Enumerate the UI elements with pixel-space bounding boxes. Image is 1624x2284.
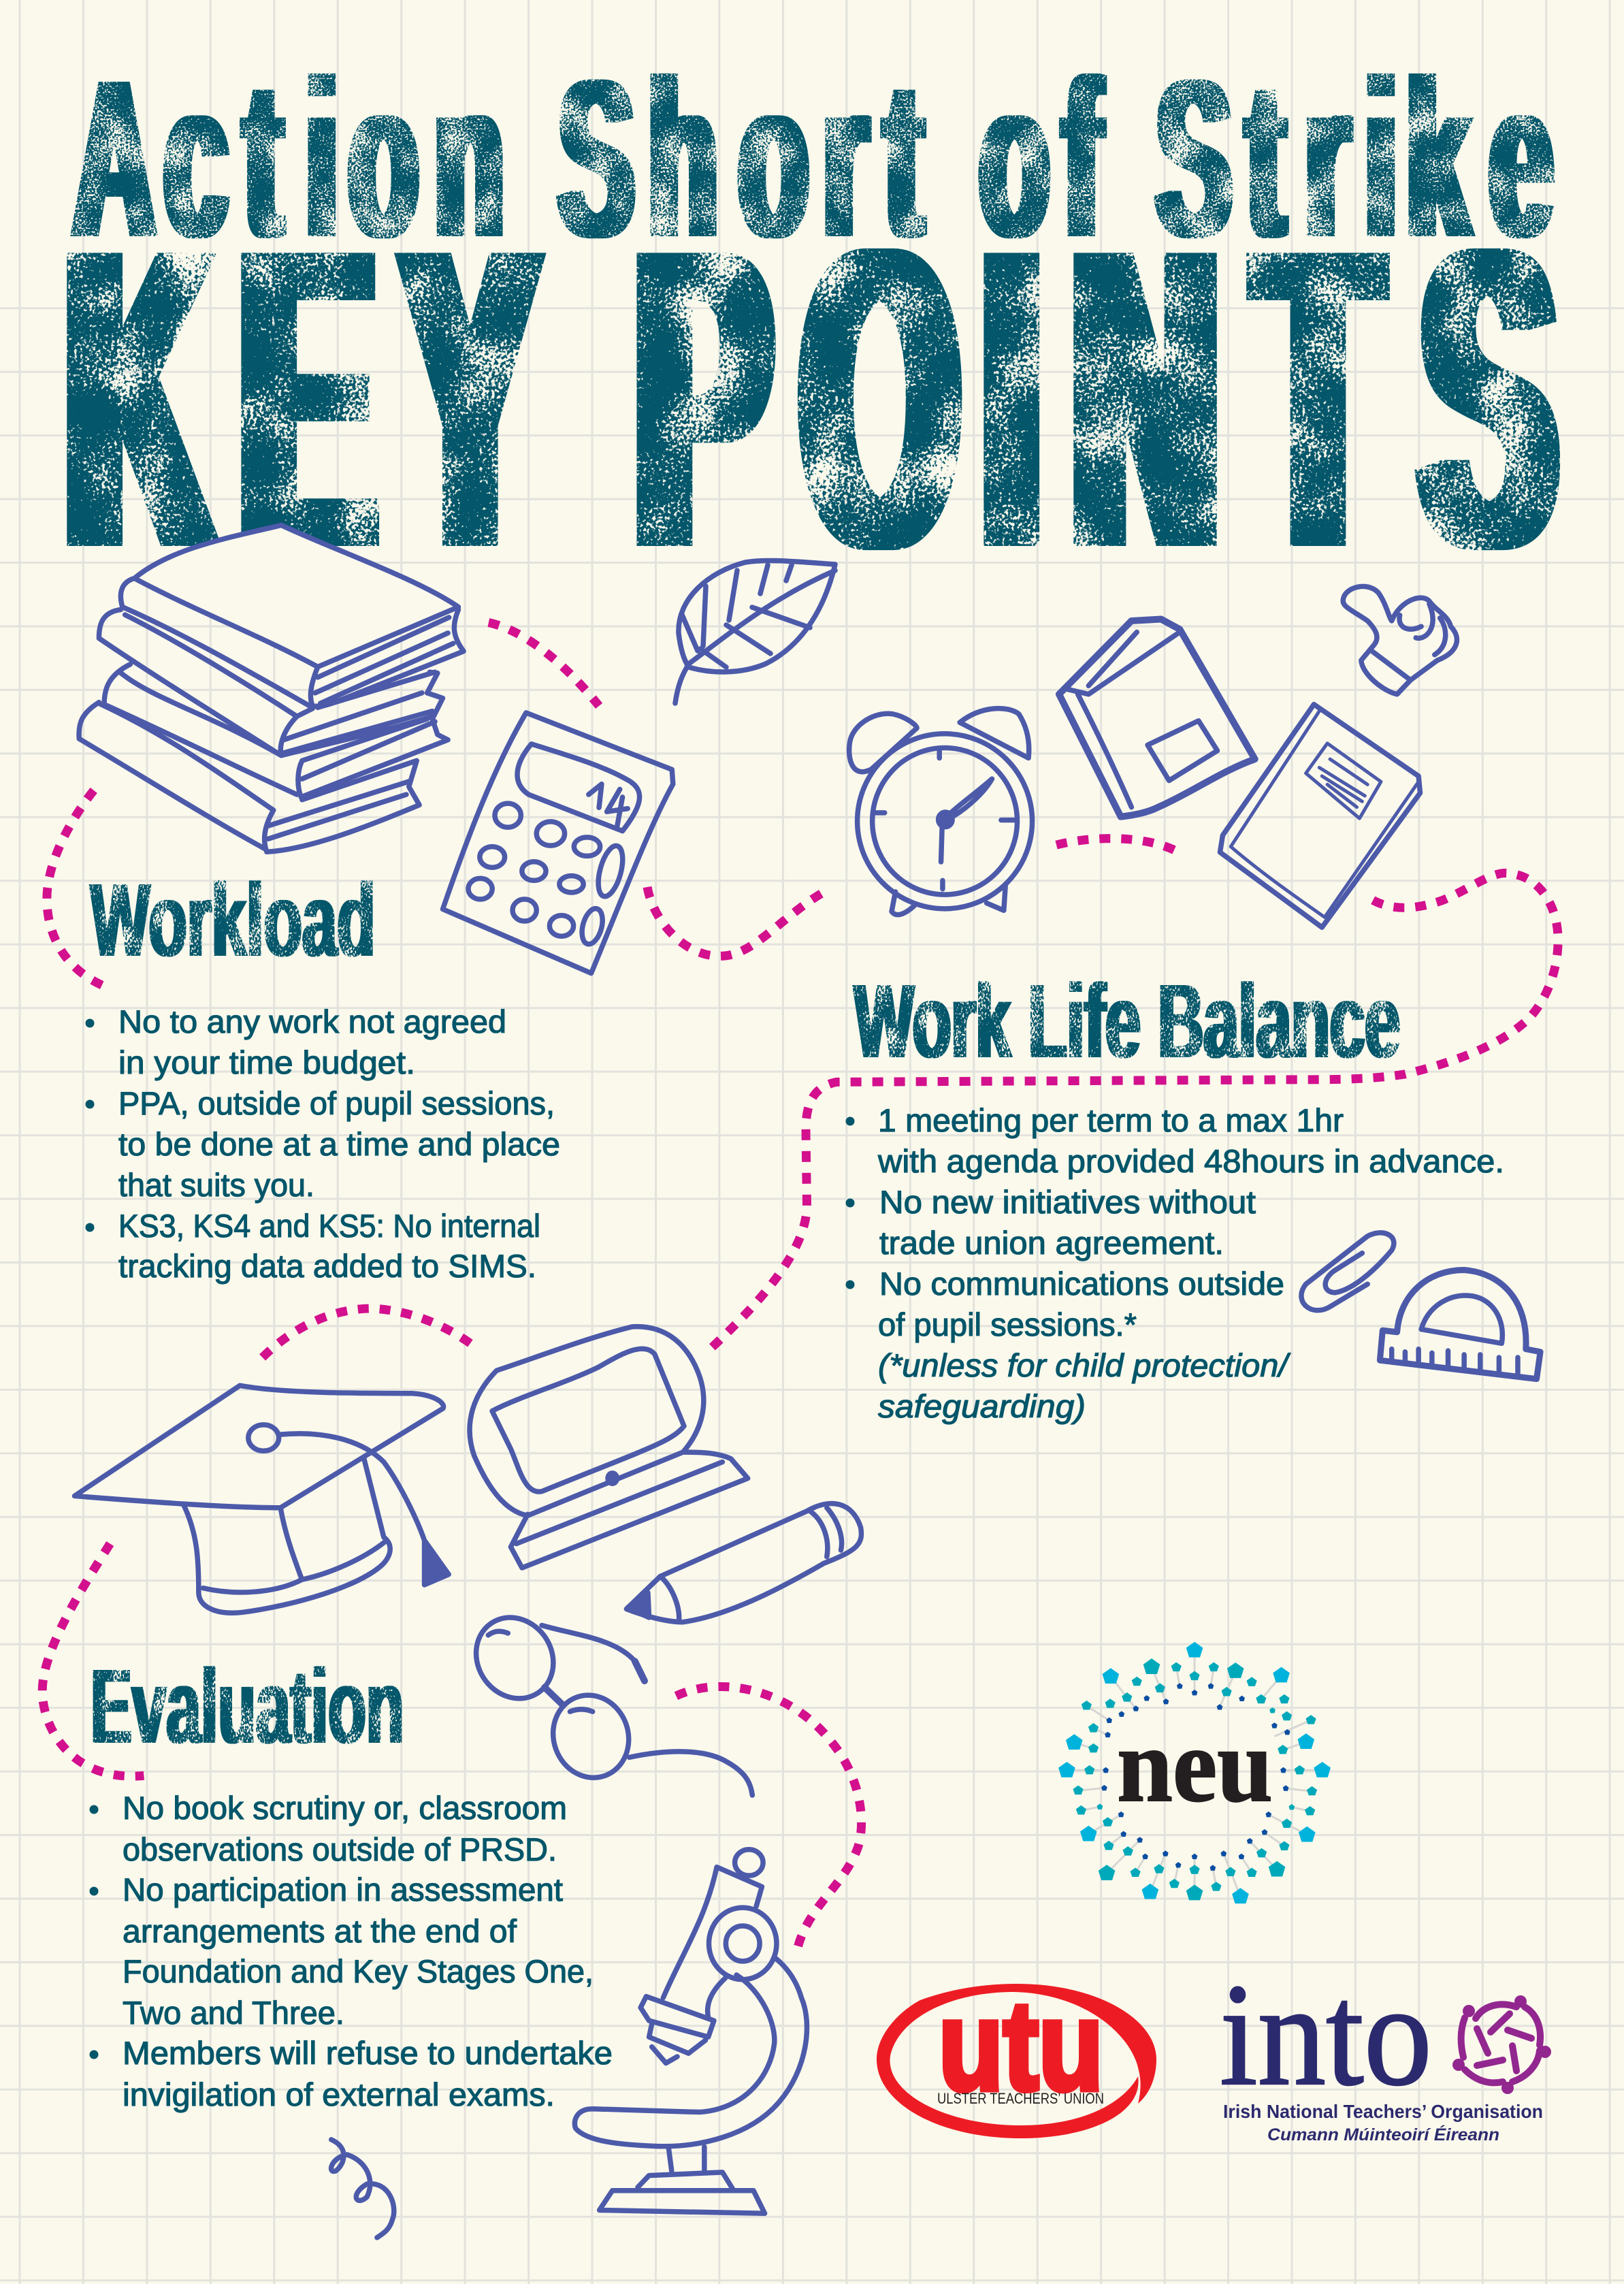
logo: into [1220,1953,1543,2144]
text: workload bullets: that suits you. [118,1167,314,1203]
icon: exercise book [1220,705,1420,927]
title: Action Short of Strike: Action Short of Strike [74,34,1553,285]
icon: squiggle [331,2140,394,2238]
logo: into: into [1220,1953,1432,2116]
text: workload bullets: KS3, KS4 and KS5: No internal [118,1208,540,1244]
logo: utu: ULSTER TEACHERS’ UNION [937,2090,1104,2107]
icon: leaf [675,560,835,703]
icon: paperclip [1301,1233,1394,1310]
logo: into: Cumann Múinteoirí Éireann [1267,2125,1499,2144]
logo: utu: utu [939,1976,1103,2117]
text: work life balance bullets: No communications outside [879,1266,1284,1302]
dotted connector lines [42,623,1558,1950]
text: evaluation bullets: Members will refuse to undertake [123,2035,613,2071]
text: workload bullets: tracking data added to SIMS. [118,1248,536,1284]
text: evaluation bullets: invigilation of external exams. [123,2076,555,2112]
text: evaluation bullets [90,1790,613,2112]
logo: utu [877,1976,1156,2138]
text: evaluation bullets: Foundation and Key Stages One, [123,1953,594,1989]
icon: into star of figures [1452,1995,1551,2094]
logo: neu: neu [1117,1707,1273,1824]
text: evaluation bullets: arrangements at the end of [123,1913,517,1949]
title: KEY POINTS: KEY POINTS [67,161,1554,637]
text: workload bullets: No to any work not agreed [118,1003,506,1040]
icon: microscope [574,1850,807,2213]
text: work life balance bullets: (*unless for child protection/ [878,1347,1291,1383]
text: work life balance bullets: No new initiatives without [879,1184,1256,1220]
text: workload bullets: to be done at a time and place [118,1126,560,1162]
icon: calculator [443,713,673,974]
icon: notebook [1059,619,1255,817]
heading: Work Life Balance: Work Life Balance [854,963,1400,1080]
icon: thumbs up [1343,586,1457,694]
text: workload bullets [86,1003,560,1284]
heading: Evaluation: Evaluation [91,1647,404,1765]
text: work life balance bullets: with agenda provided 48hours in advance. [877,1143,1504,1179]
icon: graduation cap [74,1385,449,1613]
text: work life balance bullets [845,1102,1504,1424]
text: workload bullets: PPA, outside of pupil sessions, [118,1085,555,1121]
text: evaluation bullets: Two and Three. [123,1995,344,2031]
icon: computer [470,1327,748,1568]
logo: neu [1058,1642,1331,1903]
logo: into: Irish National Teachers’ Organisation [1223,2101,1543,2122]
text: workload bullets: in your time budget. [118,1044,415,1080]
icon: glasses [465,1603,752,1795]
icon: stack of books [79,525,464,852]
text: work life balance bullets: 1 meeting per term to a max 1hr [878,1102,1344,1138]
icon: pencil [626,1504,861,1622]
heading: Workload: Workload [91,862,376,978]
text: work life balance bullets: trade union agreement. [879,1225,1224,1261]
text: work life balance bullets: safeguarding) [878,1388,1086,1424]
text: evaluation bullets: No book scrutiny or, classroom [123,1790,567,1826]
icon: protractor [1380,1270,1540,1379]
text: evaluation bullets: observations outside of PRSD. [123,1831,557,1867]
icon: alarm clock [849,709,1033,915]
text: evaluation bullets: No participation in assessment [123,1871,563,1908]
text: work life balance bullets: of pupil sessions.* [878,1306,1137,1342]
